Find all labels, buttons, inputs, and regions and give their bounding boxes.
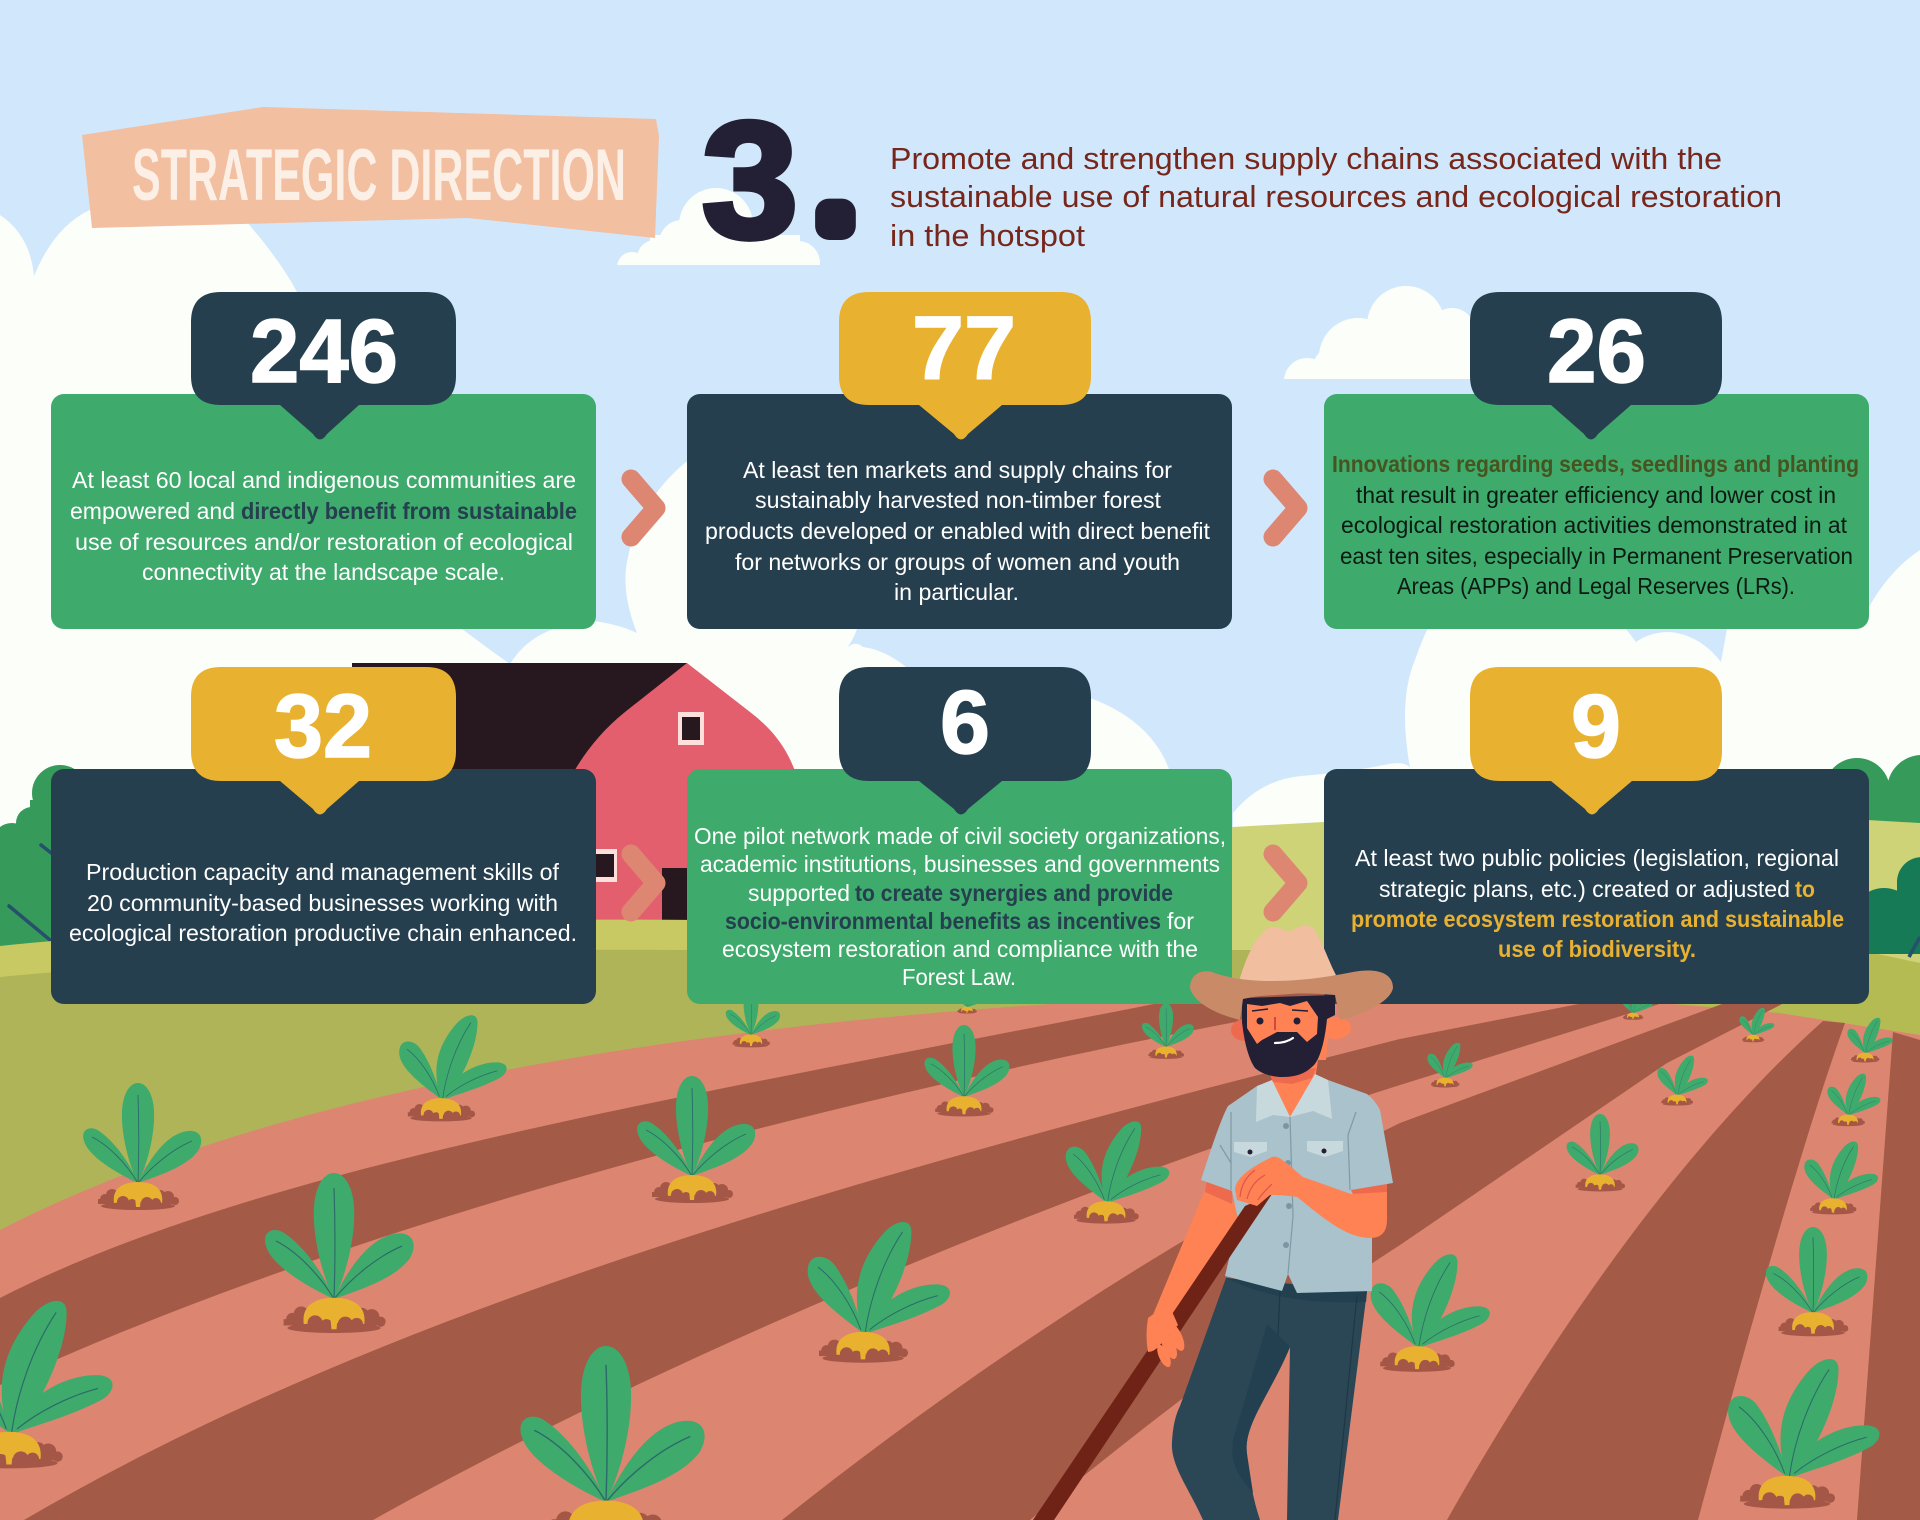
- card 2: 77: 77: [912, 299, 1016, 399]
- card 4: 32: 32: [274, 677, 372, 777]
- card 5: 6: 6: [940, 673, 990, 773]
- card 5: 6: for: [1167, 908, 1194, 934]
- card 2: 77: in particular.: [894, 579, 1019, 605]
- card 5: 6: Forest Law.: [902, 964, 1016, 990]
- collar: [1256, 1074, 1332, 1122]
- card 6: 9: promote ecosystem restoration and sustainable: [1351, 906, 1844, 932]
- card 6: 9: 9: [1571, 677, 1621, 777]
- subtitle: [890, 141, 1782, 253]
- trousers: [1172, 1278, 1367, 1520]
- arrow: card 4 to card 5: [631, 854, 656, 912]
- card 1: 246: At least 60 local and indigenous communities are: [72, 467, 576, 493]
- arrow: card 5 to card 6: [1273, 854, 1298, 912]
- subtitle: Promote and strengthen supply chains associated with the: [890, 141, 1722, 176]
- subtitle: sustainable use of natural resources and ecological restoration: [890, 179, 1782, 214]
- card 5: 6: socio-environmental benefits as incentives: [725, 908, 1161, 934]
- card 5: 6: academic institutions, businesses and governments: [700, 851, 1220, 877]
- card 1: 246: use of resources and/or restoration of ecological: [75, 529, 573, 555]
- right bushes: [1720, 755, 1920, 850]
- subtitle: in the hotspot: [890, 218, 1085, 253]
- card 6: 9: use of biodiversity.: [1498, 936, 1696, 962]
- arrow: card 1 to card 2: [631, 479, 656, 537]
- card 1: 246: [51, 292, 596, 629]
- card 3: 26: Areas (APPs) and Legal Reserves (LRs).: [1397, 573, 1795, 599]
- card 5: 6: to create synergies and provide: [855, 880, 1173, 906]
- card 1: 246: directly benefit from sustainable: [241, 498, 577, 524]
- card 1: 246: empowered and: [70, 498, 235, 524]
- card 6: 9: to: [1795, 876, 1815, 902]
- sleeve cuffs: [1205, 1180, 1387, 1204]
- clouds: [0, 188, 1920, 827]
- card 3: 26: 26: [1547, 302, 1646, 402]
- hat brim: [1190, 971, 1393, 1020]
- card 6: 9: At least two public policies (legislation, regional: [1355, 845, 1839, 871]
- card 5: 6: [687, 667, 1232, 1004]
- big number 3.: 3: [702, 88, 798, 272]
- facial details: [1252, 1009, 1308, 1043]
- card 3: 26: Innovations regarding seeds, seedlings and planting: [1332, 451, 1859, 477]
- farmer illustration: [1033, 926, 1393, 1520]
- card 4: 32: ecological restoration productive chain enhanced.: [69, 920, 577, 946]
- card 6: 9: [1324, 667, 1869, 1004]
- card 2: 77: [687, 292, 1232, 629]
- red barn: [352, 663, 805, 920]
- neck: [1270, 1060, 1318, 1118]
- card 4: 32: 20 community-based businesses working with: [87, 890, 558, 916]
- card 4: 32: Production capacity and management skills of: [86, 859, 560, 885]
- left bush: [0, 765, 88, 955]
- hills: [0, 820, 1920, 1300]
- card 2: 77: products developed or enabled with direct benefit: [705, 518, 1211, 544]
- face: [1245, 998, 1332, 1060]
- right dark bushes: [1852, 857, 1920, 957]
- card 2: 77: sustainably harvested non-timber forest: [755, 487, 1162, 513]
- card 2: 77: for networks or groups of women and youth: [735, 549, 1180, 575]
- field: [0, 985, 1920, 1520]
- header banner: STRATEGIC DIRECTION: [132, 135, 626, 216]
- bent arm and hand on hoe: [1235, 1157, 1387, 1238]
- card 6: 9: strategic plans, etc.) created or adjusted: [1379, 876, 1790, 902]
- card 5: 6: supported: [748, 880, 850, 906]
- plants: [0, 983, 1893, 1520]
- left arm: [1150, 1185, 1240, 1325]
- big number 3.: .: [823, 146, 848, 246]
- card 3: 26: that result in greater efficiency and lower cost in: [1356, 482, 1836, 508]
- card 3: 26: east ten sites, especially in Permanent Preservation: [1340, 543, 1853, 569]
- arrow: card 2 to card 3: [1273, 479, 1298, 537]
- card 3: 26: ecological restoration activities demonstrated in at: [1341, 512, 1848, 538]
- hoe handle: [1033, 1194, 1272, 1520]
- chin shadow: [1270, 1068, 1316, 1084]
- header banner: [82, 107, 659, 238]
- card 2: 77: At least ten markets and supply chains for: [743, 457, 1172, 483]
- lower hand: [1146, 1307, 1188, 1369]
- hair and beard: [1242, 995, 1335, 1077]
- ears: [1231, 1017, 1351, 1041]
- card 5: 6: ecosystem restoration and compliance with the: [722, 936, 1198, 962]
- card 5: 6: One pilot network made of civil society organizations,: [694, 823, 1226, 849]
- shirt pockets and buttons: [1220, 1112, 1356, 1274]
- big number 3.: [702, 88, 848, 272]
- card 4: 32: [51, 667, 596, 1004]
- card 1: 246: 246: [250, 302, 398, 402]
- card 1: 246: connectivity at the landscape scale.: [142, 559, 505, 585]
- shirt: [1201, 1080, 1393, 1293]
- card 3: 26: [1324, 292, 1869, 629]
- hat crown: [1238, 926, 1336, 990]
